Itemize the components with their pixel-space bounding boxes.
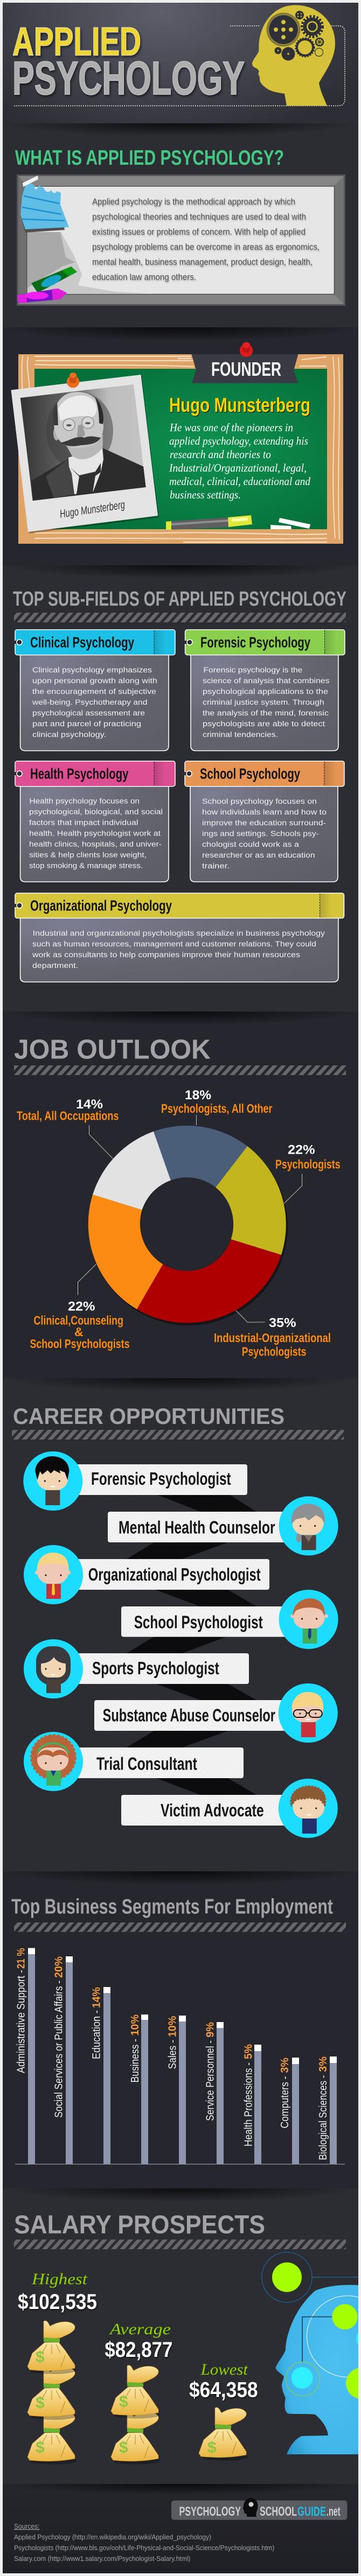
career: organizational psychologist — [24, 1545, 269, 1604]
card: health psychology: Health Psychology — [30, 766, 129, 782]
avatar: blond hair — [24, 1545, 83, 1604]
card: forensic psychology: the analysis of the mind, forensic — [203, 709, 329, 717]
career: forensic psychologist: Forensic Psychologist — [91, 1469, 231, 1489]
card: health psychology: psychological, biological, and social — [29, 808, 163, 816]
avatar: grey hair — [279, 1496, 338, 1555]
heading: JOB OUTLOOK — [14, 1034, 211, 1065]
founder bio: Industrial/Organizational, legal, — [169, 461, 307, 474]
bar: business: Business - — [129, 2039, 141, 2082]
card: school psychology — [184, 761, 344, 882]
salary column: average: Average — [109, 2320, 171, 2338]
heading: WHAT IS APPLIED PSYCHOLOGY? — [15, 146, 284, 170]
label: 35% industrial-organizational psychologists: Industrial-Organizational — [214, 1331, 331, 1345]
note text: education law among others. — [92, 272, 196, 282]
icon: money bags x3: $ — [36, 2348, 45, 2366]
icon: red pin — [240, 342, 253, 357]
icon: green crayon — [31, 266, 77, 293]
card: forensic psychology: science of analysis that combines — [203, 677, 330, 685]
label: 18% psychologists all other — [161, 1088, 273, 1125]
card: school psychology: improve the education surround- — [202, 819, 326, 827]
logo — [171, 2498, 347, 2520]
salary column: highest: Highest — [31, 2270, 88, 2288]
icon: money bags x3: $ — [36, 2394, 45, 2412]
founder bio — [169, 421, 310, 501]
founder bio: He was one of the pioneers in — [169, 421, 293, 434]
avatar: curly auburn hair with headband — [24, 1732, 83, 1791]
career: school psychologist — [121, 1590, 338, 1649]
bar: social services: Social Services or Public Affairs - — [53, 1981, 65, 2118]
card: clinical psychology: Clinical psychology emphasizes — [32, 666, 152, 674]
career: mental health counselor: Mental Health Counselor — [119, 1518, 275, 1538]
avatar: long dark hair — [24, 1639, 83, 1698]
bar: sales: 10% — [167, 2016, 179, 2037]
bar: administrative support — [16, 1948, 35, 2164]
salary column: lowest — [189, 2361, 258, 2461]
donut chart — [88, 1126, 288, 1325]
panel: top business segments — [3, 1871, 358, 2188]
bar: sales: Sales - — [167, 2040, 179, 2069]
panel: salary prospects — [3, 2188, 361, 2484]
card: forensic psychology: psychologists are able to detect — [203, 720, 325, 728]
icon: yellow head with gears — [252, 5, 335, 106]
bar: biological sciences — [317, 2056, 337, 2164]
panel: job outlook — [3, 1012, 358, 1378]
career: school psychologist: School Psychologist — [134, 1612, 263, 1632]
label: 18% psychologists all other: Psychologists, All Other — [161, 1101, 273, 1115]
sources: Psychologists (http://www.bls.gov/ooh/Life-Physical-and-Social-Science/Psychologists.htm) — [14, 2544, 274, 2552]
sources: Salary.com (http://www1.salary.com/Psychologist-Salary.html) — [14, 2555, 190, 2563]
card: health psychology — [15, 761, 175, 882]
career: substance abuse counselor — [94, 1683, 338, 1743]
label: 35% industrial-organizational psychologists: Psychologists — [242, 1344, 306, 1358]
card: organizational psychology: such as human resources, management and customer relations. They could — [32, 940, 316, 948]
connector shadows — [127, 1495, 256, 1795]
heading: SALARY PROSPECTS — [14, 2210, 265, 2239]
panel: header — [3, 3, 358, 123]
label: 22% psychologists: 22% — [288, 1142, 315, 1157]
career: trial consultant: Trial Consultant — [96, 1754, 197, 1773]
career: forensic psychologist — [23, 1451, 247, 1511]
card: clinical psychology: clinical psychology. — [32, 731, 106, 739]
bar: education — [91, 1987, 110, 2164]
note text: psychological theories and techniques are used to deal with — [92, 212, 306, 222]
card: health psychology: sities & help clients lose weight, — [29, 851, 147, 859]
title — [12, 19, 245, 104]
bar: service personnel: 9% — [205, 2022, 217, 2038]
bar: social services: 20% — [53, 1956, 65, 1978]
card: clinical psychology: upon personal growth along with — [32, 677, 157, 685]
logo: .net — [327, 2504, 341, 2519]
icon: orange pin — [67, 373, 79, 388]
avatar: curly brown hair — [279, 1779, 338, 1838]
bar: biological sciences: 3% — [317, 2056, 329, 2072]
career: substance abuse counselor: Substance Abuse Counselor — [103, 1705, 275, 1725]
bar: biological sciences: Biological Sciences - — [317, 2075, 329, 2160]
signature: Hugo Munsterberg — [59, 499, 126, 521]
career: sports psychologist: Sports Psychologist — [92, 1658, 219, 1678]
card: forensic psychology: psychological applications to the — [203, 687, 328, 696]
founder bio: research and theories to — [170, 448, 271, 461]
panel: founder — [3, 327, 358, 565]
card: forensic psychology: Forensic Psychology — [200, 634, 310, 651]
salary column: highest: $102,535 — [18, 2290, 97, 2314]
card: clinical psychology: part and parcel of practicing — [32, 720, 141, 728]
panel: career opportunities — [3, 1378, 358, 1871]
salary column: average: $82,877 — [105, 2338, 172, 2362]
bar: business — [129, 2015, 148, 2164]
bar: health professions: Health Professions - — [242, 2062, 254, 2146]
bar: sales — [167, 2016, 186, 2164]
card: school psychology: trainer. — [202, 862, 230, 870]
divider — [12, 1430, 344, 1440]
card: forensic psychology: Forensic psychology is the — [204, 666, 303, 674]
founder ribbon: FOUNDER — [211, 358, 281, 380]
title: PSYCHOLOGY — [12, 52, 245, 104]
card: organizational psychology: Industrial and organizational psychologists specialize in business psychology — [33, 929, 325, 937]
card: school psychology: School psychology focuses on — [202, 797, 317, 805]
card: school psychology: ings and settings. Schools psy- — [202, 830, 319, 838]
career: trial consultant — [24, 1732, 244, 1791]
label: 35% industrial-organizational psychologists: 35% — [269, 1316, 296, 1330]
card: health psychology: health. Health psychologist work at — [29, 829, 161, 838]
icon: money bags x2: $ — [119, 2393, 128, 2411]
salary column: highest — [18, 2270, 97, 2465]
icon: chalk — [270, 518, 310, 529]
card: organizational psychology — [15, 893, 344, 982]
panel: what is applied psychology — [3, 123, 358, 327]
divider — [14, 1065, 346, 1075]
bar: administrative support: Administrative Support - — [16, 1970, 27, 2073]
founder name: Hugo Munsterberg — [170, 395, 311, 417]
card: school psychology: researcher or as an education — [202, 851, 315, 859]
note text: existing issues or problems of concern. With help of applied — [92, 227, 306, 237]
label: 22% psychologists: Psychologists — [275, 1157, 341, 1171]
label: 14% total all occupations: Total, All Occupations — [17, 1109, 119, 1123]
polaroid photo — [11, 373, 159, 534]
panel: top sub-fields — [3, 565, 358, 1012]
card: health psychology: health clinics, hospitals, and univer- — [29, 840, 162, 848]
founder bio: business settings. — [170, 488, 241, 501]
founder ribbon — [192, 354, 298, 383]
note text — [92, 196, 320, 282]
label: 22% psychologists — [275, 1142, 341, 1204]
bar: administrative support: 21 % — [16, 1948, 27, 1969]
heading: CAREER OPPORTUNITIES — [13, 1403, 284, 1429]
card: organizational psychology: work as consultants to help companies improve their human resources — [32, 951, 300, 959]
label: 35% industrial-organizational psychologists — [214, 1310, 331, 1358]
icon: black head with bulb — [243, 2498, 258, 2517]
salary column: average — [105, 2320, 172, 2465]
sources — [14, 2523, 274, 2563]
card: clinical psychology: well-being. Psychotherapy and — [32, 698, 147, 706]
label: 22% clinical counseling and school psychologists: 22% — [68, 1300, 95, 1314]
logo: PSYCHOLOGY — [179, 2504, 241, 2519]
bar: education: 14% — [91, 1987, 102, 2008]
founder bio: medical, clinical, educational and — [169, 475, 310, 488]
card: forensic psychology — [184, 630, 345, 750]
note text: Applied psychology is the methodical approach by which — [92, 196, 295, 207]
divider — [14, 2240, 346, 2249]
baseline axis — [15, 2164, 345, 2165]
avatar: auburn hair — [279, 1590, 338, 1649]
dotted frame line — [14, 26, 345, 106]
career: mental health counselor — [108, 1496, 338, 1555]
avatar: blond hair with glasses — [279, 1683, 338, 1743]
career: organizational psychologist: Organizational Psychologist — [88, 1564, 261, 1584]
card: school psychology: School Psychology — [200, 766, 300, 782]
sources: Sources: — [14, 2523, 40, 2530]
label: 18% psychologists all other: 18% — [185, 1088, 211, 1103]
title: APPLIED — [12, 19, 141, 64]
framed note panel — [17, 174, 345, 306]
icon: money bag x1: $ — [207, 2439, 217, 2456]
label: 22% clinical counseling and school psychologists: School Psychologists — [30, 1337, 129, 1351]
card: organizational psychology: Organizational Psychology — [30, 897, 172, 914]
logo: GUIDE — [297, 2504, 326, 2519]
card: health psychology: stop smoking & manage stress. — [29, 861, 143, 870]
card: clinical psychology — [15, 630, 175, 750]
card: health psychology: factors that impact individual — [29, 818, 138, 827]
bar: service personnel: Service Personnel - — [205, 2040, 217, 2121]
avatar: dark hair — [23, 1451, 82, 1511]
label: 22% clinical counseling and school psychologists: Clinical,Counseling — [33, 1313, 123, 1327]
card: school psychology: how individuals learn and how to — [202, 808, 327, 816]
note text: mental health, business management, product design, health, — [92, 257, 313, 267]
career: sports psychologist — [24, 1639, 249, 1698]
bar: service personnel — [205, 2022, 224, 2164]
bar: computers: Computers - — [279, 2076, 291, 2129]
panel: founder: Hugo Munsterberg — [169, 394, 310, 416]
portrait — [31, 392, 147, 503]
salary column: lowest: Lowest — [200, 2361, 248, 2378]
card: clinical psychology: Clinical Psychology — [30, 634, 134, 651]
sources: Applied Psychology (http://en.wikipedia.org/wiki/Applied_psychology) — [14, 2533, 211, 2541]
note text: psychology problems can be overcome in areas as ergonomics, — [92, 242, 320, 252]
icon: money bags x2 — [111, 2365, 160, 2465]
card: school psychology: chologist could work as a — [202, 840, 300, 848]
card: clinical psychology: psychological assessment are — [32, 709, 145, 717]
salary column: lowest: $64,358 — [189, 2378, 258, 2402]
founder bio: applied psychology, extending his — [169, 434, 308, 447]
icon: torn blue note — [20, 176, 69, 233]
label: 22% clinical counseling and school psychologists — [30, 1264, 129, 1351]
icon: magenta crayon — [17, 289, 67, 303]
bar: health professions — [242, 2044, 261, 2164]
career: victim advocate: Victim Advocate — [161, 1800, 264, 1820]
card: health psychology: Health psychology focuses on — [29, 797, 140, 805]
bar: business: 10% — [129, 2015, 141, 2036]
icon: money bags x3: $ — [36, 2439, 45, 2456]
icon: marker — [166, 515, 252, 530]
chalkboard — [18, 354, 343, 544]
card: forensic psychology: criminal justice system. Through — [203, 698, 324, 706]
icon: money bags x2: $ — [119, 2439, 128, 2456]
icon: money bag x1 — [199, 2407, 248, 2461]
card: clinical psychology: the encouragement of subjective — [32, 687, 156, 696]
divider — [14, 1922, 346, 1932]
panel: footer — [3, 2484, 358, 2573]
card: forensic psychology: criminal tendencies. — [203, 731, 278, 739]
bar: health professions: 5% — [242, 2044, 254, 2059]
label: 14% total all occupations — [17, 1097, 119, 1159]
card: organizational psychology: department. — [32, 961, 78, 970]
career: victim advocate — [121, 1779, 338, 1838]
label: 14% total all occupations: 14% — [76, 1097, 103, 1112]
icon: blue head diagram — [262, 2252, 361, 2454]
bar: computers: 3% — [279, 2058, 291, 2073]
label: 22% clinical counseling and school psychologists: & — [74, 1325, 84, 1339]
bar: education: Education - — [91, 2010, 102, 2059]
divider — [14, 613, 346, 622]
logo: SCHOOL — [260, 2504, 297, 2519]
bar: social services — [53, 1956, 73, 2164]
bar: computers — [279, 2058, 299, 2164]
icon: money bags x3 — [27, 2321, 77, 2465]
